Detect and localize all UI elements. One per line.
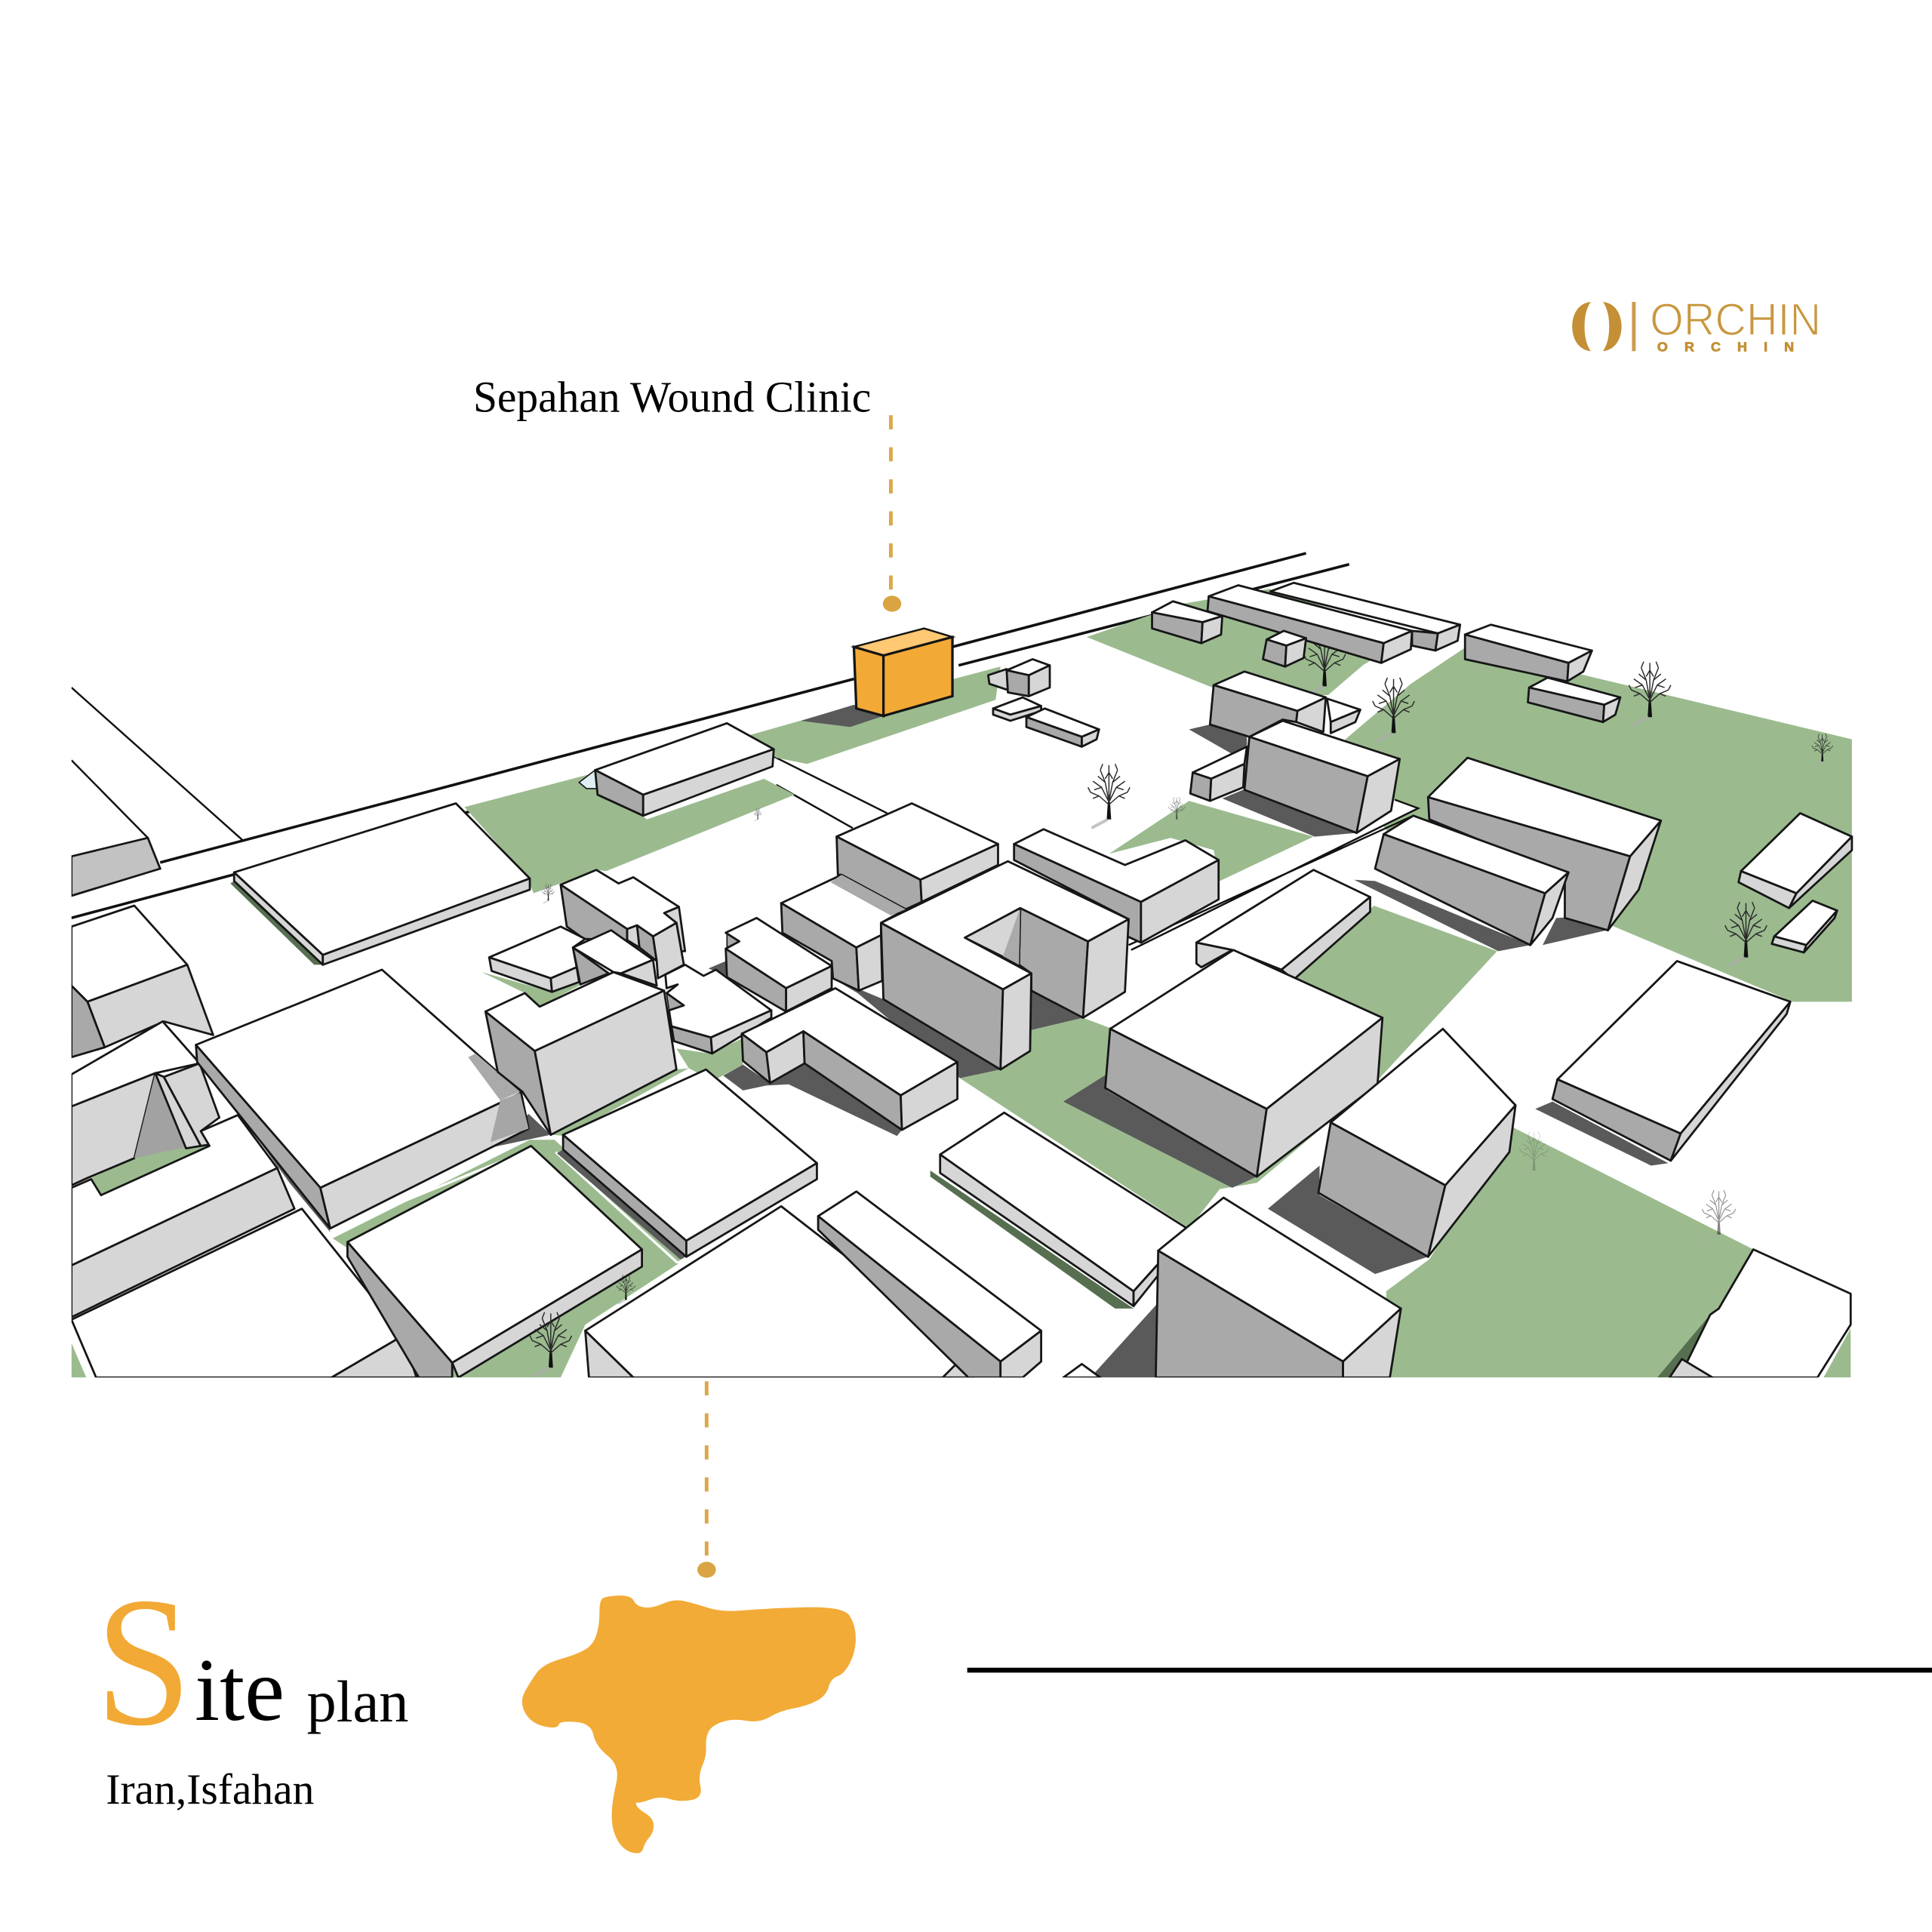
green areas [72, 589, 1852, 1377]
road building flat [579, 723, 774, 816]
logo [1572, 294, 1821, 354]
small roof fragment bottom [1063, 1364, 1100, 1377]
block group centre [781, 803, 1219, 991]
far right small flats [1739, 814, 1852, 952]
road strip right [1129, 800, 1418, 950]
U-shaped building [881, 861, 1129, 1069]
roads [72, 553, 1349, 918]
pointed cube [1318, 1029, 1515, 1257]
flat building upper left [234, 803, 530, 964]
bottom right building [1669, 1250, 1850, 1377]
left side buildings [72, 906, 417, 1377]
top row buildings [1152, 583, 1620, 722]
long building by road right [1196, 870, 1371, 980]
logo mark [1572, 302, 1635, 351]
logo wordmark: ORCHIN [1650, 294, 1821, 345]
clinic leader line [883, 415, 901, 612]
flat right [1552, 961, 1790, 1161]
buildings centre right back [1190, 672, 1400, 833]
map leader line [697, 1381, 716, 1578]
divider line [968, 1668, 1932, 1672]
title: Site plan [96, 1559, 408, 1764]
long block bottom [818, 1192, 1041, 1377]
building: top left corner [72, 838, 160, 896]
cast shadows [210, 705, 1710, 1377]
big cube [1105, 950, 1383, 1177]
site model [72, 553, 1852, 1377]
flat block lower centre [563, 1069, 817, 1257]
logo small wordmark: ORCHIN [1657, 339, 1794, 354]
big block bottom centre [586, 1206, 974, 1377]
large pair right [1375, 758, 1661, 945]
tall block centre left [485, 972, 676, 1135]
title: Site plan: ite [195, 1640, 285, 1740]
long flat centre right [940, 1112, 1189, 1306]
clinic label: Sepahan Wound Clinic [473, 372, 871, 421]
small buildings near clinic [988, 659, 1099, 746]
map of Isfahan province [523, 1596, 855, 1853]
white kerbs [405, 1152, 685, 1263]
T-shaped building [742, 988, 958, 1130]
title: Site plan: plan [307, 1669, 408, 1734]
trees back row [542, 631, 1833, 966]
bottom cube [1155, 1198, 1401, 1377]
front trees [530, 1132, 1736, 1377]
small complex left of centre [489, 870, 832, 1054]
large flat block [196, 970, 528, 1229]
orange clinic building [854, 629, 952, 716]
flat block lower left [347, 1146, 642, 1377]
subtitle: location: Iran,Isfahan [106, 1766, 314, 1814]
title: Site plan: S [96, 1559, 192, 1764]
